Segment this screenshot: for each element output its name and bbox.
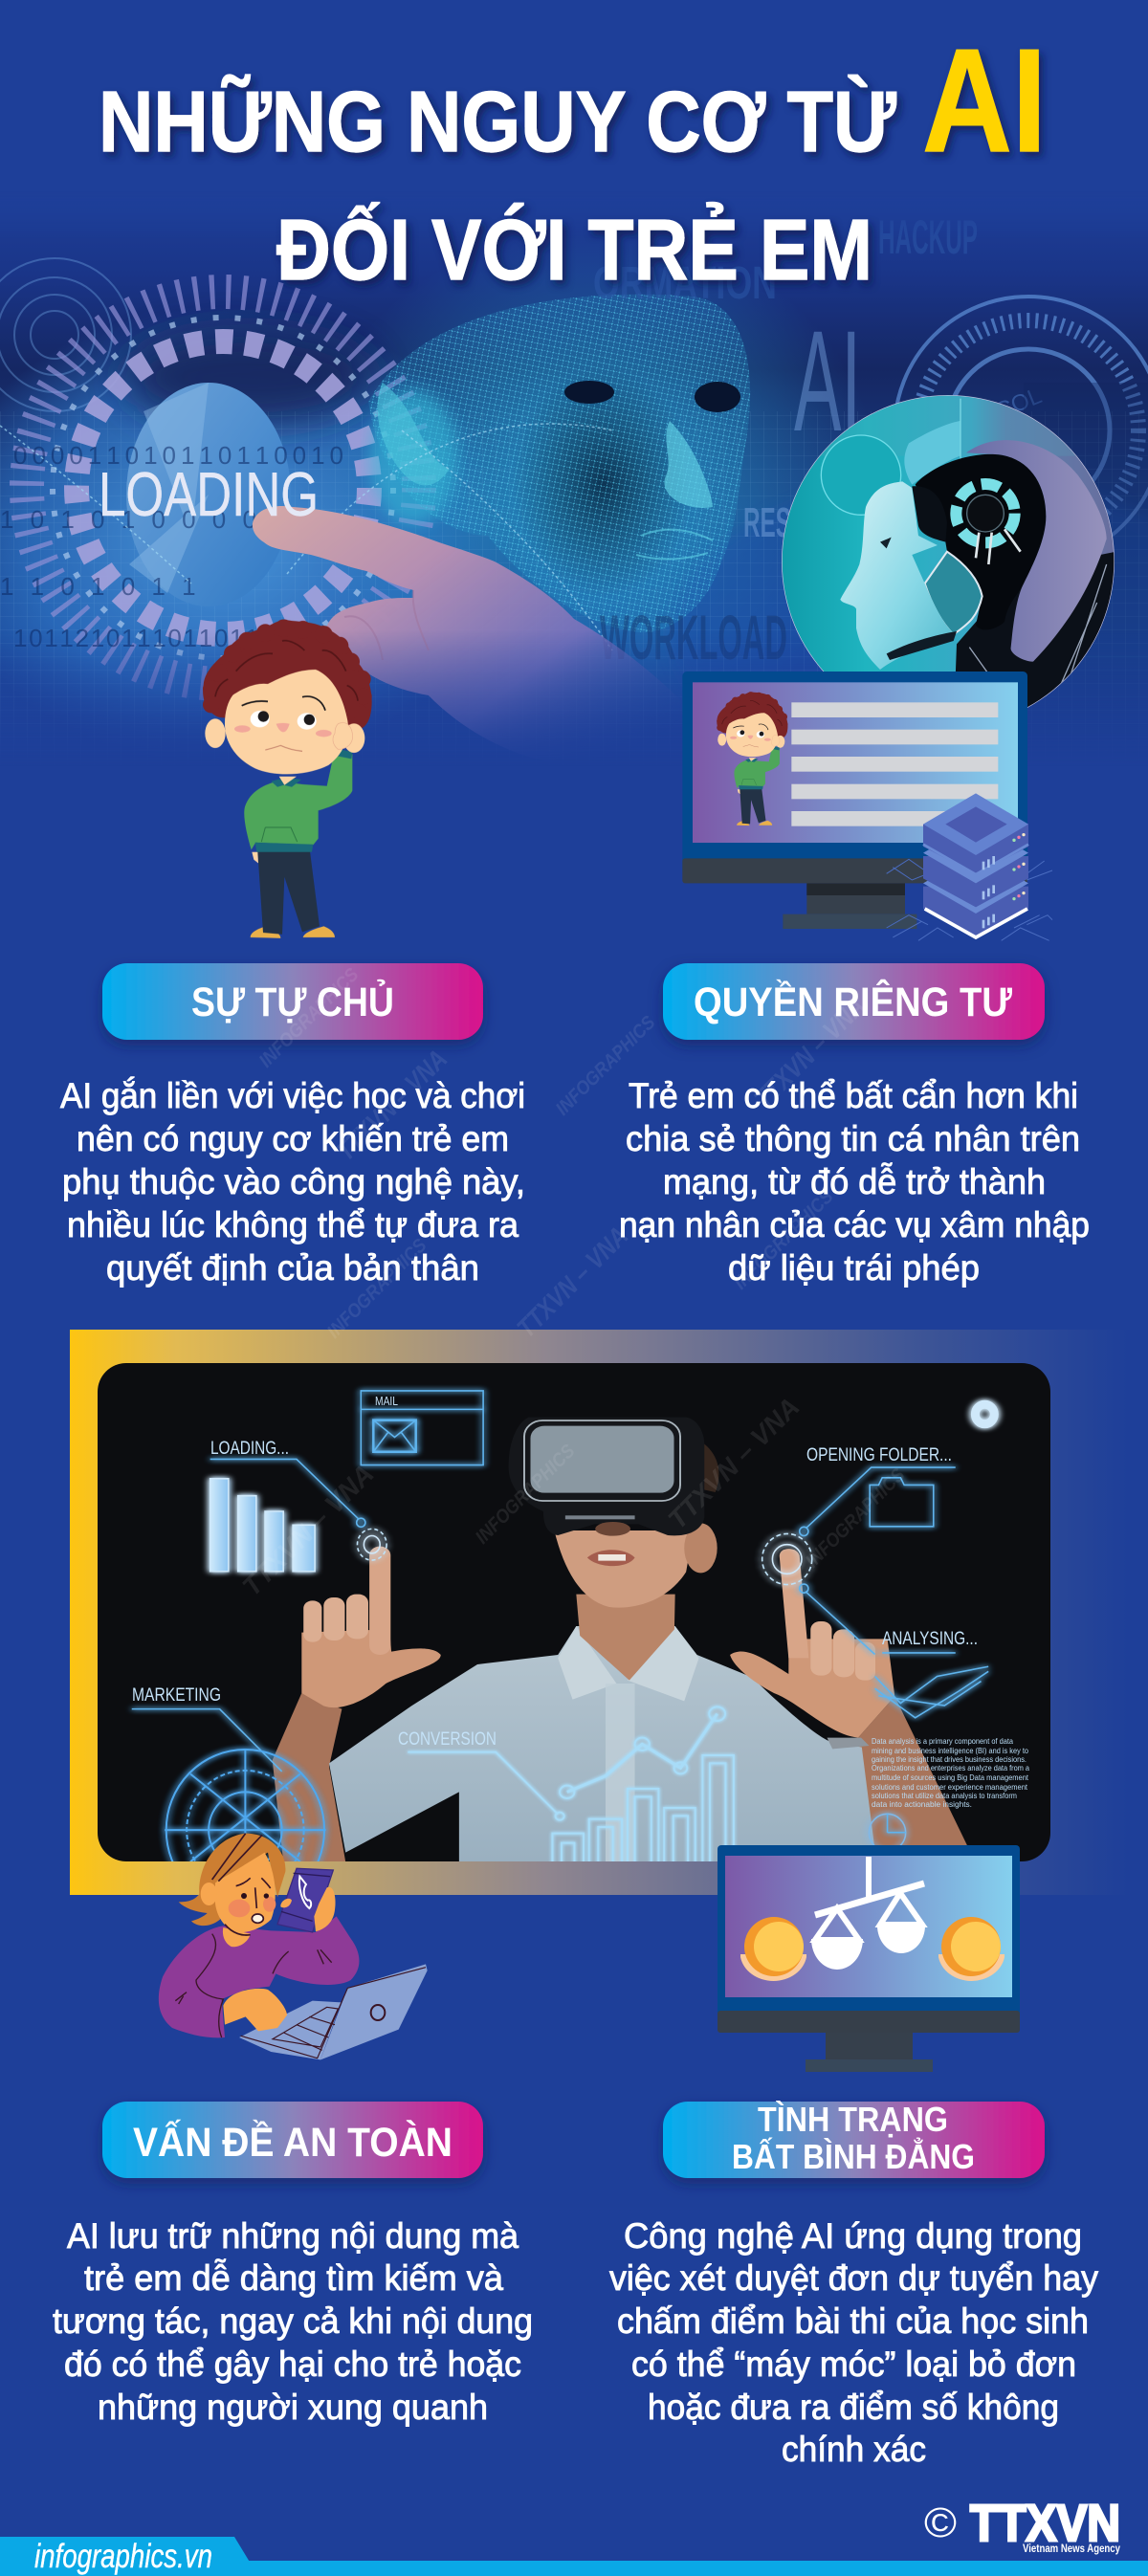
- watermarks: INFOGRAPHICS: [323, 1235, 431, 1343]
- phone: [277, 1868, 333, 1932]
- AI highlight: AI: [922, 18, 1047, 183]
- gear: [956, 484, 1015, 542]
- binary digits: 0 0 0 0 1 1 0 1 0 1 1 0 1 1 0 0 1 0: [13, 441, 348, 470]
- hologram labels: LOADING...: [210, 1439, 289, 1459]
- text: privacy: Trẻ em có thể bất cẩn hơn khi: [629, 1076, 1078, 1115]
- sweater: [159, 1916, 359, 2037]
- pill: TÌNH TRẠNG BẤT BÌNH ĐẲNG: BẤT BÌNH ĐẲNG: [732, 2136, 975, 2176]
- footer bar: [0, 2537, 1148, 2576]
- hologram paragraph: mining and business intelligence (BI) and is key to: [872, 1746, 1028, 1755]
- TTXVN logo: [924, 2495, 1120, 2555]
- hologram paragraph: Organizations and enterprises analyze data from a: [872, 1763, 1029, 1772]
- left hand: [301, 1629, 441, 1707]
- binary digits: 1 0 1 0 1 0 0 0 0 1 0: [0, 505, 321, 534]
- face mesh: [0, 277, 775, 650]
- face: [840, 481, 954, 670]
- pill: VẤN ĐỀ AN TOÀN: VẤN ĐỀ AN TOÀN: [133, 2120, 453, 2166]
- loading bars: [210, 1479, 315, 1572]
- folder: [870, 1478, 934, 1527]
- gradient photo frame: [70, 1330, 1129, 1895]
- woman with phone and laptop: [159, 1834, 428, 2059]
- gear icon: [975, 1404, 994, 1424]
- text: privacy: dữ liệu trái phép: [728, 1248, 980, 1288]
- hologram paragraph: gaining the insight that drives business decisions.: [872, 1754, 1027, 1764]
- text: safety: tương tác, ngay cả khi nội dung: [53, 2301, 533, 2341]
- lower face: [554, 1530, 694, 1608]
- monitor: scales: [718, 1845, 1020, 2072]
- holograms: [132, 1391, 994, 1910]
- text: inequality: có thể “máy móc” loại bỏ đơn: [631, 2345, 1076, 2384]
- face: [215, 1853, 276, 1932]
- title line 2: ĐỐI VỚI TRẺ EM: [276, 201, 872, 298]
- watermarks: TTXVN – VNA: [662, 1392, 806, 1534]
- pill: TÌNH TRẠNG BẤT BÌNH ĐẲNG: TÌNH TRẠNG: [758, 2100, 948, 2139]
- monitor stand: [783, 883, 916, 929]
- shirt: [329, 1626, 876, 1862]
- watermarks: [236, 964, 910, 1601]
- title: [99, 18, 1047, 298]
- hand on phone: [280, 1887, 336, 1931]
- text: safety: đó có thể gây hại cho trẻ hoặc: [64, 2345, 521, 2384]
- neck and cables: [955, 552, 1114, 708]
- laptop: [239, 1964, 428, 2059]
- hologram labels: [132, 1394, 978, 1750]
- pill: QUYỀN RIÊNG TƯ: QUYỀN RIÊNG TƯ: [694, 979, 1012, 1025]
- background words: AI: [794, 300, 861, 461]
- mail window: [361, 1391, 483, 1465]
- background words: PROTOCOL: [916, 383, 1046, 455]
- pie icon: [869, 1814, 906, 1851]
- protocol dial, top right: [894, 297, 1148, 564]
- hologram paragraph: multitude of sources using Big Data management: [872, 1772, 1029, 1782]
- person: [273, 1418, 975, 1862]
- marketing radar: [132, 1709, 282, 1772]
- hologram paragraph: solutions and customer experience management: [872, 1782, 1028, 1792]
- watermarks: TTXVN – VNA: [748, 991, 871, 1113]
- text: inequality: [609, 2216, 1098, 2469]
- server stack: [923, 793, 1028, 939]
- watermarks: TTXVN – VNA: [330, 1044, 453, 1166]
- text: safety: AI lưu trữ những nội dung mà: [67, 2216, 519, 2256]
- hologram labels: MARKETING: [132, 1685, 221, 1706]
- lilac shell: [966, 440, 1107, 662]
- text: safety: [53, 2216, 533, 2427]
- text: autonomy: AI gắn liền với việc học và chơi: [60, 1076, 525, 1115]
- pointing hand: [253, 506, 662, 743]
- text: inequality: chính xác: [782, 2430, 926, 2469]
- wristband: [827, 1738, 869, 1749]
- robot head circle: [782, 395, 1115, 708]
- watermarks: INFOGRAPHICS: [730, 1186, 838, 1294]
- text: autonomy: phụ thuộc vào công nghệ này,: [62, 1162, 525, 1201]
- mechanical cheek: [925, 552, 982, 634]
- monitor screen: [693, 682, 1018, 843]
- agency name: Vietnam News Agency: [1023, 2542, 1120, 2555]
- text: privacy: chia sẻ thông tin cá nhân trên: [626, 1119, 1080, 1158]
- loading dial: [27, 292, 419, 684]
- background words: HACKUP: [878, 210, 978, 264]
- text: autonomy: quyết định của bản thân: [106, 1248, 479, 1288]
- photo: child with VR headset: [98, 1363, 1050, 1910]
- hologram paragraph: solutions that utilize data analysis to transform: [872, 1791, 1017, 1800]
- typing hand: [223, 1989, 287, 2031]
- concentric rings, top left: [0, 258, 131, 411]
- neck: [576, 1595, 675, 1681]
- text: inequality: chấm điểm bài thi của học sinh: [617, 2301, 1089, 2341]
- text: inequality: hoặc đưa ra điểm số không: [648, 2388, 1059, 2427]
- text: safety: những người xung quanh: [98, 2388, 488, 2427]
- pill: TÌNH TRẠNG BẤT BÌNH ĐẲNG: [663, 2100, 1045, 2178]
- forearms: [273, 1693, 345, 1862]
- hair: [179, 1834, 285, 1926]
- copyright mark: ©: [924, 2499, 957, 2546]
- text: inequality: việc xét duyệt đơn dự tuyển hay: [609, 2258, 1098, 2298]
- text: autonomy: nên có nguy cơ khiến trẻ em: [77, 1119, 509, 1158]
- watermarks: TTXVN – VNA: [236, 1459, 380, 1601]
- background words: WORKLOAD: [600, 602, 787, 672]
- text: autonomy: nhiều lúc không thể tự đưa ra: [67, 1205, 519, 1244]
- right hand: [730, 1639, 894, 1738]
- hologram labels: MAIL: [375, 1394, 398, 1408]
- text: autonomy: [60, 1076, 525, 1288]
- title line 1: NHỮNG NGUY CƠ TỪ: [99, 74, 896, 170]
- mini boy on screen: [717, 692, 787, 826]
- pill: VẤN ĐỀ AN TOÀN: [102, 2102, 483, 2178]
- coin right: [938, 1917, 1004, 1981]
- text bars: [791, 702, 998, 826]
- watermarks: INFOGRAPHICS: [802, 1464, 910, 1573]
- TTXVN logo: TTXVN: [970, 2495, 1120, 2552]
- binary digits: 1 0 1 1 2 1 0 1 1 1 0 1 1 0 1 1 1 0 1: [13, 624, 310, 652]
- balance scale: [811, 1857, 925, 1970]
- binary digits: 1 1 0 1 0 1 1: [0, 572, 201, 601]
- analysing graph: [875, 1666, 988, 1718]
- watermarks: INFOGRAPHICS: [472, 1441, 580, 1549]
- VR headset: [509, 1418, 704, 1535]
- watermarks: TTXVN – VNA: [511, 1221, 633, 1343]
- watermarks: INFOGRAPHICS: [255, 964, 364, 1072]
- pill: SỰ TỰ CHỦ: [102, 963, 483, 1040]
- coin left: [740, 1917, 806, 1981]
- watermarks: INFOGRAPHICS: [552, 1012, 660, 1120]
- hologram labels: ANALYSING...: [882, 1629, 978, 1649]
- pill: QUYỀN RIÊNG TƯ: [663, 963, 1045, 1040]
- background words: [593, 210, 1046, 672]
- conversion chart: [408, 1706, 734, 1865]
- hologram paragraph: data into actionable insights.: [872, 1799, 972, 1809]
- hologram paragraph: [872, 1736, 1029, 1809]
- hero image: AI and technology collage: [0, 228, 1148, 743]
- binary digits: [0, 441, 348, 652]
- loading connector: [210, 1459, 359, 1519]
- black skull: [916, 454, 1046, 629]
- text: inequality: Công nghệ AI ứng dụng trong: [624, 2216, 1082, 2256]
- text: privacy: mạng, từ đó dễ trở thành: [663, 1162, 1046, 1201]
- hologram paragraph: Data analysis is a primary component of data: [872, 1736, 1013, 1746]
- monitor: privacy: [682, 672, 1052, 940]
- background words: ORMATION: [593, 258, 777, 309]
- hologram labels: OPENING FOLDER...: [806, 1445, 952, 1465]
- footer website: infographics.vn: [34, 2538, 212, 2575]
- background words: RES: [743, 499, 791, 546]
- text: privacy: [619, 1076, 1090, 1288]
- monitor body: [682, 672, 1027, 875]
- hologram labels: CONVERSION: [398, 1729, 497, 1750]
- circuit lines: [887, 859, 1052, 940]
- loading label: LOADING: [99, 459, 319, 529]
- text: safety: trẻ em dễ dàng tìm kiếm và: [84, 2258, 503, 2298]
- boy character: [203, 619, 372, 938]
- pill: SỰ TỰ CHỦ: SỰ TỰ CHỦ: [191, 979, 394, 1025]
- text: privacy: nạn nhân của các vụ xâm nhập: [619, 1205, 1090, 1244]
